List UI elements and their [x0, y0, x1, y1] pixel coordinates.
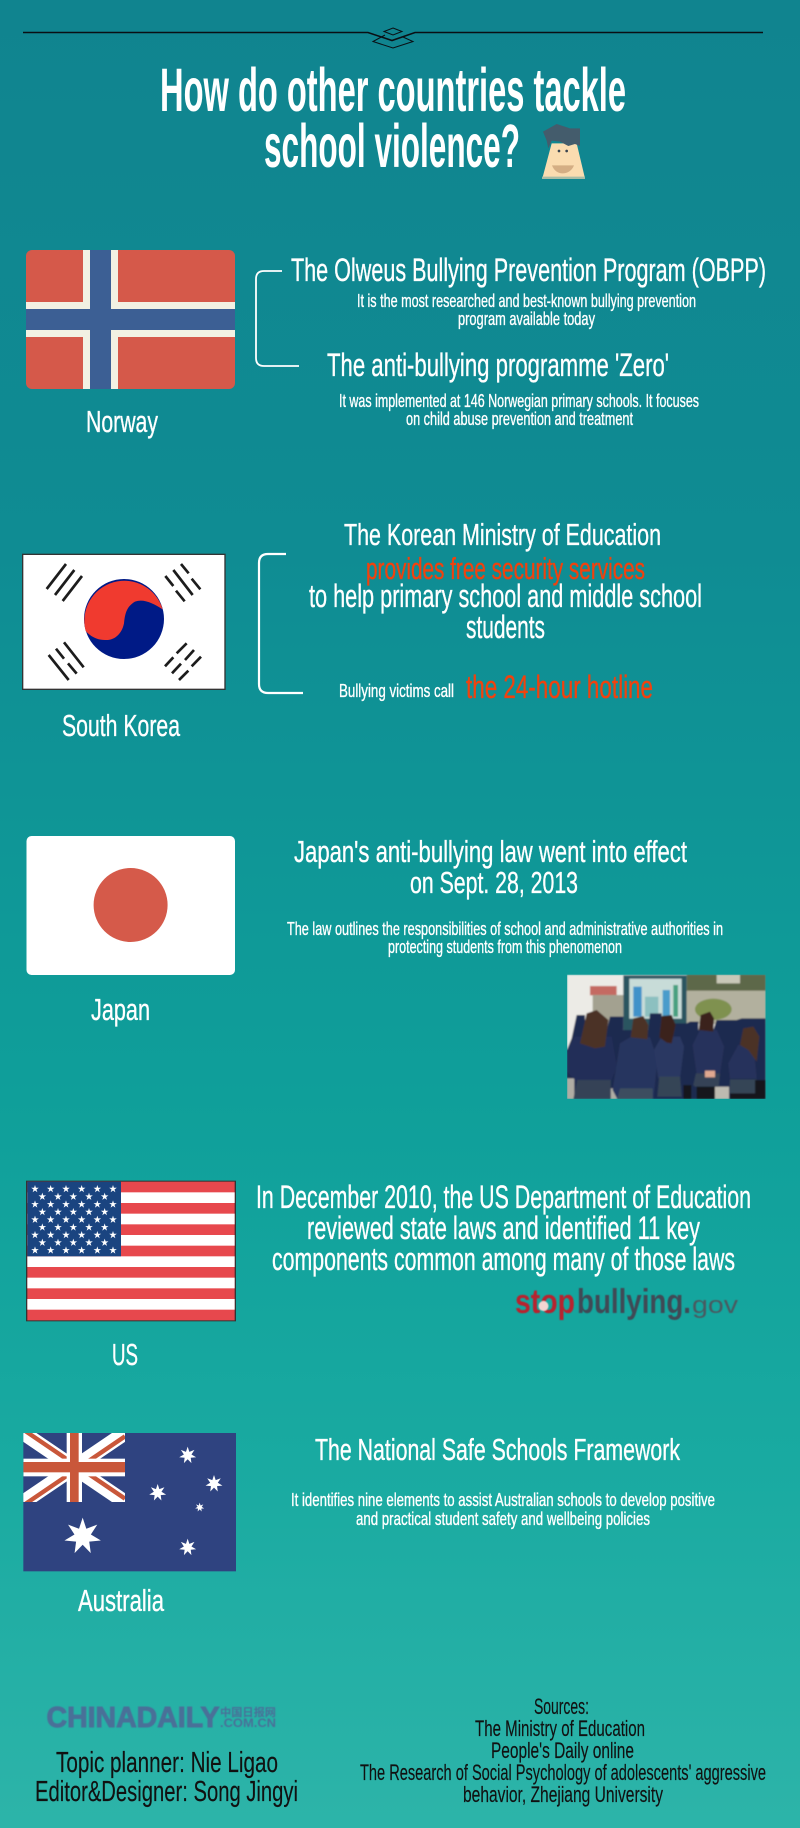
flag: Australia [23, 1430, 236, 1571]
footer logo: China Daily: CHINADAILY [46, 1702, 220, 1734]
heading: Japan law [294, 834, 687, 900]
text: law description: protecting students from this phenomenon [388, 937, 622, 957]
logo: stopbullying.gov: bullying. [577, 1283, 691, 1321]
bracket [256, 271, 299, 366]
photo: students in uniform [567, 975, 766, 1099]
ground [567, 1078, 766, 1099]
label: Australia: Australia [78, 1583, 165, 1618]
credits: Topic planner: Nie Ligao [56, 1747, 278, 1779]
label: South Korea: South Korea [62, 708, 181, 743]
bracket [259, 554, 303, 693]
text: Zero description: on child abuse prevention and treatment [406, 409, 633, 429]
label: Norway: Norway [86, 404, 158, 439]
icon: cartoon face [542, 124, 585, 179]
text: law description [287, 919, 723, 957]
sources [360, 1694, 766, 1807]
panel: South Korea [23, 517, 702, 743]
flag: US [26, 1181, 236, 1321]
text: OBPP description: program available today [458, 309, 595, 329]
heading: ministry: The Korean Ministry of Education [344, 517, 661, 552]
text: framework description [291, 1490, 715, 1529]
sources: People's Daily online [491, 1738, 634, 1763]
heading: US Department of Education [256, 1179, 751, 1277]
credits: Editor&Designer: Song Jingyi [35, 1776, 298, 1808]
footer logo: China Daily: 中国日报网 [220, 1705, 276, 1719]
students [567, 1037, 617, 1082]
sources: behavior, Zhejiang University [463, 1782, 663, 1807]
header divider with diamond ornament [23, 28, 763, 48]
sources: Sources: [534, 1694, 589, 1719]
text: OBPP description [357, 291, 696, 329]
highlight: free security services: provides free security services [366, 551, 645, 586]
footer logo: China Daily: .COM.CN [220, 1716, 276, 1730]
logo: stopbullying.gov: stop [515, 1283, 575, 1321]
text: framework description: and practical student safety and wellbeing policies [356, 1509, 650, 1529]
text: hotline: Bullying victims call [339, 681, 454, 701]
panel: Japan [26, 834, 766, 1099]
logo: stopbullying.gov [515, 1283, 738, 1321]
title: school violence? [264, 112, 520, 180]
logo: stopbullying.gov: gov [692, 1292, 738, 1319]
flag: Japan [26, 836, 235, 975]
text: help schools: students [466, 609, 545, 645]
panel: Norway [26, 250, 766, 439]
heading: Japan law: on Sept. 28, 2013 [410, 865, 578, 900]
flag: South Korea [23, 554, 225, 689]
panel: Australia [23, 1430, 715, 1618]
sources: The Ministry of Education [475, 1716, 645, 1741]
crowd behind [567, 1013, 766, 1099]
label: US: US [112, 1337, 138, 1372]
title [160, 56, 626, 180]
flag: Norway [26, 250, 235, 389]
label: Japan: Japan [91, 992, 150, 1027]
text: help schools [309, 578, 702, 645]
panel: US [26, 1179, 751, 1372]
text: hotline: the 24-hour hotline [466, 669, 653, 705]
credits [35, 1747, 298, 1808]
text: hotline [339, 669, 653, 705]
text: Zero description [339, 391, 699, 429]
